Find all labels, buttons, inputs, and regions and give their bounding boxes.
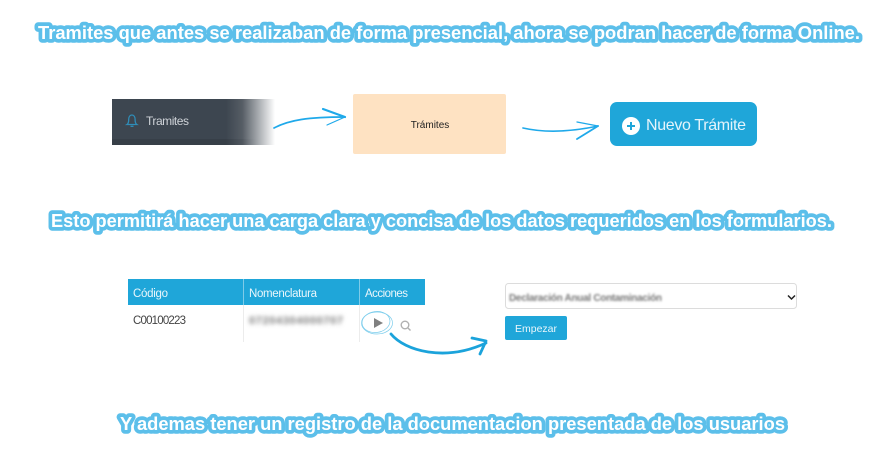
menu label: Tramites bbox=[146, 114, 189, 128]
highlight circle bbox=[361, 310, 392, 334]
table header: Nomenclatura bbox=[249, 288, 318, 300]
table header: Código bbox=[133, 288, 168, 300]
button: Empezar: Empezar bbox=[515, 323, 558, 335]
form: select bbox=[506, 284, 796, 308]
icon: play bbox=[374, 318, 383, 328]
icon: chevron bbox=[788, 296, 795, 299]
table bbox=[128, 279, 425, 342]
arrow: panel to button bbox=[523, 122, 598, 139]
heading: tramites online: Tramites que antes se realizaban de forma presencial, ahora se podran hacer de forma Online. bbox=[38, 22, 860, 43]
table cell: blurred value: 07204304000707 bbox=[249, 315, 343, 327]
button: Nuevo Trámite: Nuevo Trámite bbox=[646, 117, 746, 134]
icon: plus bbox=[622, 117, 640, 135]
arrow: action to form bbox=[391, 334, 486, 354]
icon: bell bbox=[127, 115, 137, 126]
button: Nuevo Trámite bbox=[610, 102, 757, 146]
panel: Trámites bbox=[353, 94, 506, 154]
table cell: code: C00100223 bbox=[133, 315, 186, 327]
table header: Acciones bbox=[365, 288, 408, 300]
icon: search bbox=[401, 321, 410, 330]
form: select: Declaración Anual Contaminación bbox=[509, 293, 662, 304]
menu item: Tramites bbox=[112, 99, 275, 145]
heading: registro: Y ademas tener un registro de la documentacion presentada de los usuarios bbox=[120, 413, 785, 434]
arrow: menu to panel bbox=[274, 109, 345, 128]
table header bbox=[128, 279, 425, 305]
button: Empezar bbox=[505, 316, 567, 340]
panel: Trámites: Trámites bbox=[411, 120, 449, 131]
heading: carga clara: Esto permitirá hacer una carga clara y concisa de los datos requeridos en los formularios. bbox=[51, 210, 832, 231]
